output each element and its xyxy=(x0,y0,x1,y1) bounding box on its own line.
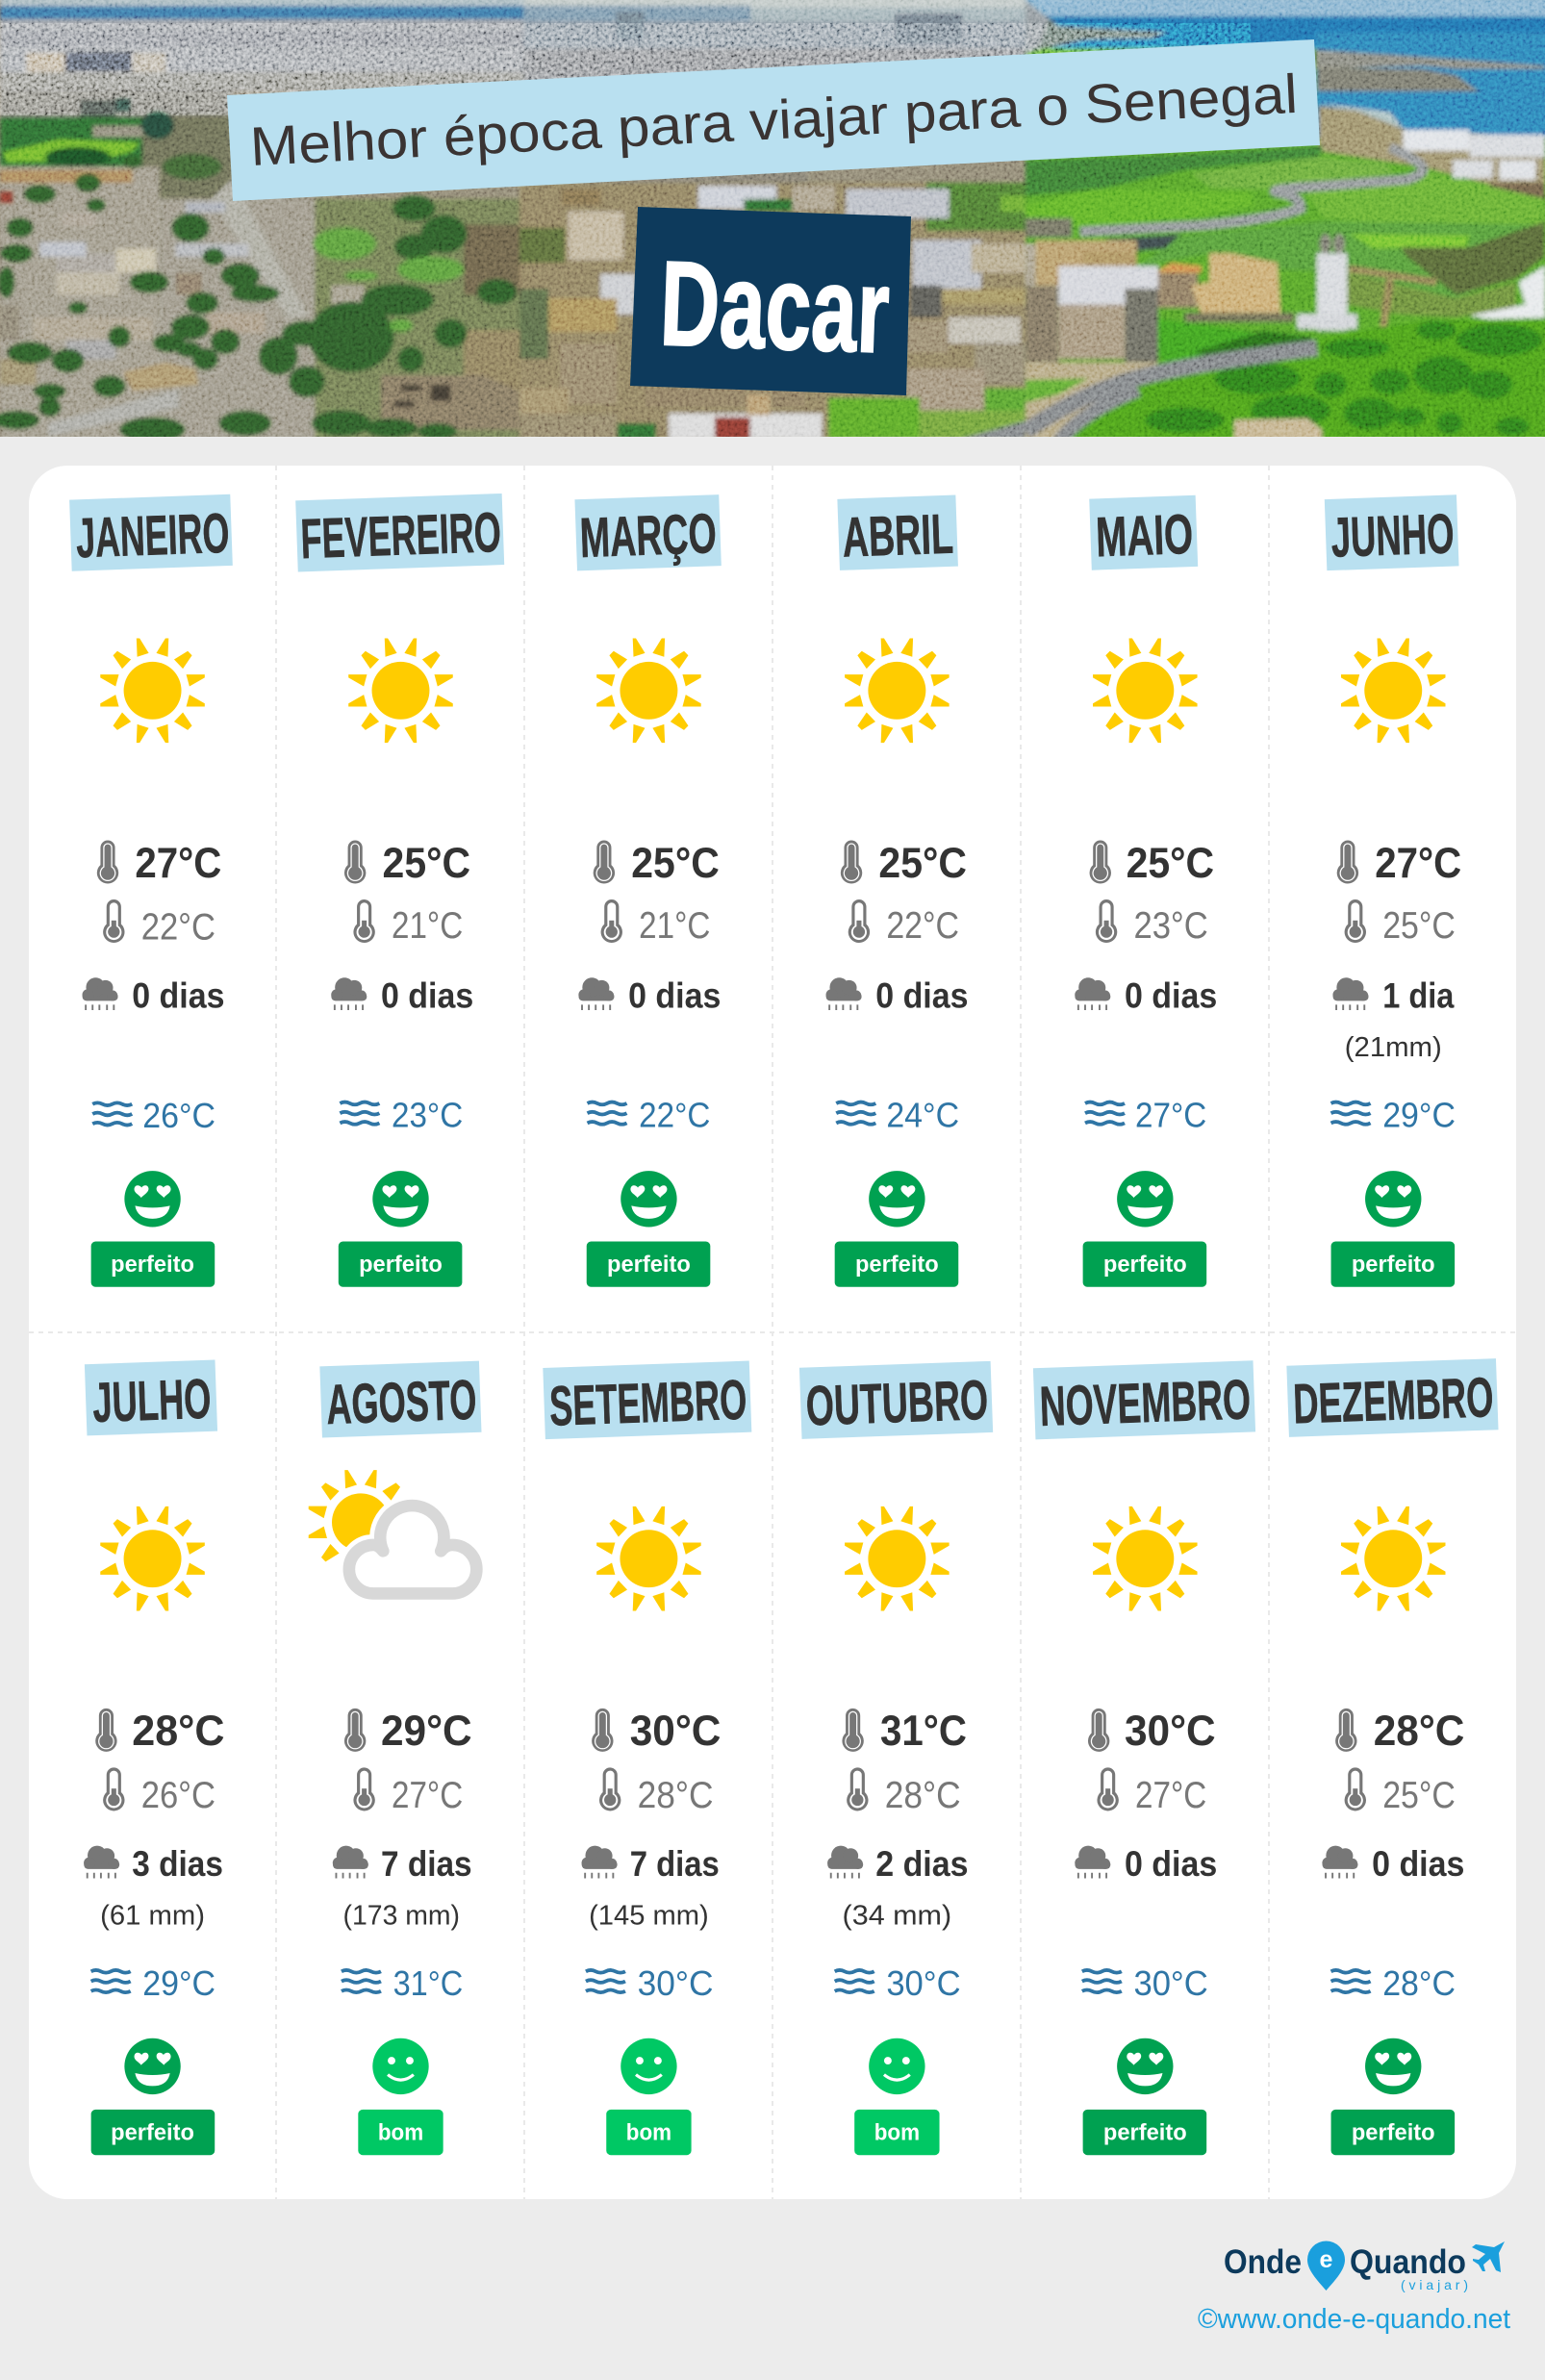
logo: Onde e Quando viajar: (viajar) xyxy=(1401,2277,1468,2292)
rain days xyxy=(826,975,969,1016)
rating face: perfeito xyxy=(372,1171,429,1227)
heading: agosto xyxy=(319,1361,481,1437)
min temperature: 21°C xyxy=(639,905,710,947)
rain days xyxy=(582,1843,720,1884)
max temperature xyxy=(1088,1708,1216,1755)
max temperature xyxy=(841,840,967,887)
city name: Dacar xyxy=(630,207,911,395)
max temperature: 25°C xyxy=(878,840,967,887)
sea temperature: 23°C xyxy=(392,1095,463,1134)
min temperature: 28°C xyxy=(885,1775,961,1816)
max temperature: 25°C xyxy=(1127,840,1214,887)
panel: agosto xyxy=(309,1361,481,2155)
rating face: perfeito xyxy=(1365,1171,1421,1227)
heading: agosto: AGOSTO xyxy=(325,1369,478,1436)
rating badge: bom: bom xyxy=(378,2120,423,2145)
heading: janeiro xyxy=(69,494,233,571)
rating badge: perfeito xyxy=(91,2110,215,2155)
min temperature: 26°C xyxy=(141,1775,215,1816)
sea temperature: 30°C xyxy=(886,1963,961,2003)
panel: fevereiro xyxy=(295,494,504,1287)
rating badge: bom: bom xyxy=(626,2120,671,2145)
rating badge: perfeito: perfeito xyxy=(111,2120,194,2145)
rain days: 0 dias xyxy=(1372,1843,1464,1884)
rating badge: perfeito xyxy=(91,1241,215,1287)
rating face: perfeito xyxy=(869,1171,925,1227)
sea temperature: 26°C xyxy=(142,1096,215,1135)
rating face: perfeito xyxy=(124,1171,181,1227)
panel: monthly climate table xyxy=(29,466,1516,2199)
rating face: perfeito xyxy=(1365,2038,1421,2094)
rain amount: (34 mm) xyxy=(843,1900,951,1931)
rating badge: bom xyxy=(606,2110,692,2155)
max temperature: 25°C xyxy=(383,840,470,887)
min temperature: 21°C xyxy=(392,905,463,947)
sea temperature xyxy=(91,1963,215,2003)
panel: janeiro xyxy=(69,494,233,1287)
rain days xyxy=(827,1843,969,1884)
rating badge: perfeito: perfeito xyxy=(359,1253,443,1278)
rating badge: perfeito xyxy=(1083,1241,1206,1287)
heading: janeiro: JANEIRO xyxy=(75,502,230,570)
heading: maio xyxy=(1089,495,1198,570)
rating badge: bom xyxy=(358,2110,443,2155)
panel: dezembro xyxy=(1286,1358,1499,2155)
heading: outubro: OUTUBRO xyxy=(805,1369,989,1437)
sea temperature: 31°C xyxy=(393,1963,463,2003)
min temperature: 25°C xyxy=(1382,905,1456,947)
max temperature xyxy=(97,840,221,887)
heading: abril xyxy=(837,495,958,570)
rain amount: (145 mm) xyxy=(589,1900,709,1931)
rain days: 0 dias xyxy=(628,975,721,1016)
rain days: 3 dias xyxy=(132,1843,223,1884)
rating face: perfeito xyxy=(1117,1171,1173,1227)
max temperature: 28°C xyxy=(132,1708,224,1755)
min temperature xyxy=(1345,1767,1456,1816)
rain days: 0 dias xyxy=(1125,975,1217,1016)
sea temperature xyxy=(342,1963,463,2003)
min temperature: 25°C xyxy=(1382,1775,1456,1816)
max temperature: 28°C xyxy=(1374,1708,1464,1755)
heading: setembro xyxy=(543,1361,751,1439)
max temperature: 30°C xyxy=(630,1708,721,1755)
icon: sun xyxy=(1093,1506,1198,1610)
rating badge: perfeito: perfeito xyxy=(855,1253,939,1278)
min temperature xyxy=(599,1767,713,1816)
min temperature xyxy=(103,1767,215,1816)
heading: abril: ABRIL xyxy=(842,503,954,570)
rain days xyxy=(578,975,721,1016)
sea temperature xyxy=(1331,1095,1456,1134)
max temperature xyxy=(594,840,720,887)
rain days xyxy=(83,975,224,1016)
website credit: ©www.onde-e-quando.net xyxy=(1198,2304,1510,2335)
rating badge: perfeito xyxy=(1331,1241,1455,1287)
heading: julho: JULHO xyxy=(91,1368,213,1434)
heading: fevereiro xyxy=(295,494,504,572)
title banner: Melhor época para viajar para o Senegal xyxy=(248,63,1299,178)
rain days: 1 dia xyxy=(1382,975,1455,1016)
sea temperature xyxy=(586,1963,713,2003)
heading: novembro xyxy=(1033,1360,1255,1439)
max temperature xyxy=(344,840,470,887)
rain days xyxy=(1075,1843,1217,1884)
icon: sun xyxy=(596,1506,701,1610)
heading: março xyxy=(574,494,722,570)
panel: novembro xyxy=(1033,1360,1255,2155)
heading: julho xyxy=(85,1360,217,1435)
rain days: 0 dias xyxy=(381,975,473,1016)
heading: fevereiro: FEVEREIRO xyxy=(299,501,502,570)
heading: junho: JUNHO xyxy=(1330,502,1456,570)
icon: sun xyxy=(845,1506,950,1610)
heading: novembro: NOVEMBRO xyxy=(1039,1368,1252,1438)
sea temperature xyxy=(340,1095,463,1134)
rating badge: perfeito: perfeito xyxy=(1103,1253,1187,1278)
rain days: 7 dias xyxy=(630,1843,720,1884)
rain days: 7 dias xyxy=(381,1843,472,1884)
icon: location pin xyxy=(1307,2241,1345,2291)
max temperature xyxy=(1335,1708,1464,1755)
heading: setembro: SETEMBRO xyxy=(548,1369,747,1438)
sea temperature: 30°C xyxy=(638,1963,713,2003)
min temperature xyxy=(353,899,463,947)
sea temperature xyxy=(1082,1963,1208,2003)
icon: sun xyxy=(845,639,950,743)
logo: Onde e Quando viajar xyxy=(1224,2241,1505,2292)
rating badge: perfeito xyxy=(835,1241,958,1287)
rain days xyxy=(84,1843,223,1884)
sea temperature xyxy=(92,1096,215,1135)
rating face: bom xyxy=(869,2038,925,2094)
sea temperature: 24°C xyxy=(886,1095,959,1134)
rating badge: bom: bom xyxy=(874,2120,920,2145)
heading: outubro xyxy=(799,1361,993,1439)
sea temperature: 28°C xyxy=(1382,1963,1456,2003)
rating badge: perfeito xyxy=(1331,2110,1455,2155)
logo: Onde e Quando viajar: Onde xyxy=(1224,2243,1302,2281)
rating badge: perfeito: perfeito xyxy=(111,1253,194,1278)
rain days xyxy=(1332,975,1455,1016)
rain days xyxy=(333,1843,472,1884)
max temperature xyxy=(344,1708,472,1755)
max temperature: 25°C xyxy=(631,840,720,887)
max temperature xyxy=(842,1708,967,1755)
rating badge: perfeito xyxy=(587,1241,710,1287)
rating badge: bom xyxy=(854,2110,940,2155)
rain days: 2 dias xyxy=(875,1843,969,1884)
rain amount: (61 mm) xyxy=(100,1900,205,1931)
rain days xyxy=(331,975,473,1016)
min temperature: 22°C xyxy=(141,907,215,949)
rating badge: perfeito xyxy=(339,1241,462,1287)
logo: Onde e Quando viajar: Quando xyxy=(1350,2243,1466,2281)
rain amount: (21mm) xyxy=(1345,1032,1442,1063)
heading: março: MARÇO xyxy=(579,502,718,570)
sea temperature: 29°C xyxy=(1382,1095,1456,1134)
sea temperature xyxy=(588,1095,710,1134)
min temperature xyxy=(601,899,710,947)
min temperature xyxy=(847,1767,961,1816)
rating badge: perfeito: perfeito xyxy=(1352,1253,1435,1278)
sea temperature xyxy=(835,1963,961,2003)
icon: sun xyxy=(348,639,453,743)
icon: sun xyxy=(596,639,701,743)
heading: maio: MAIO xyxy=(1095,503,1194,569)
max temperature: 31°C xyxy=(880,1708,967,1755)
sea temperature: 30°C xyxy=(1133,1963,1208,2003)
rain amount: (173 mm) xyxy=(343,1900,460,1931)
banner photo: aerial view of Dakar xyxy=(0,0,1545,443)
panel: março xyxy=(574,494,722,1287)
rating badge: perfeito xyxy=(1083,2110,1206,2155)
panel: julho xyxy=(84,1360,224,2155)
max temperature: 30°C xyxy=(1125,1708,1216,1755)
icon: sun xyxy=(100,1506,205,1610)
icon: sun xyxy=(100,639,205,743)
max temperature xyxy=(1337,840,1461,887)
rain days xyxy=(1322,1843,1464,1884)
min temperature: 22°C xyxy=(886,905,959,947)
rating badge: perfeito: perfeito xyxy=(1352,2120,1435,2145)
icon: sun xyxy=(1093,639,1198,743)
panel: junho xyxy=(1325,494,1461,1287)
min temperature: 28°C xyxy=(638,1775,713,1816)
rating face: perfeito xyxy=(621,1171,677,1227)
icon: sun xyxy=(1341,639,1446,743)
sea temperature xyxy=(836,1095,959,1134)
max temperature: 27°C xyxy=(135,840,221,887)
rating face: bom xyxy=(372,2038,429,2094)
panel: maio xyxy=(1075,495,1217,1287)
min temperature xyxy=(1096,899,1208,947)
rating badge: perfeito: perfeito xyxy=(607,1253,691,1278)
min temperature xyxy=(103,899,215,949)
min temperature: 27°C xyxy=(392,1775,463,1816)
rating badge: perfeito: perfeito xyxy=(1103,2120,1187,2145)
rain days xyxy=(1075,975,1217,1016)
max temperature xyxy=(592,1708,721,1755)
min temperature xyxy=(353,1767,463,1816)
sea temperature xyxy=(1331,1963,1456,2003)
icon: airplane xyxy=(1472,2241,1505,2272)
rain days: 0 dias xyxy=(1125,1843,1217,1884)
icon: sun xyxy=(1341,1506,1446,1610)
min temperature: 27°C xyxy=(1135,1775,1206,1816)
max temperature: 29°C xyxy=(381,1708,472,1755)
panel: abril xyxy=(826,495,969,1287)
sea temperature xyxy=(1085,1095,1206,1134)
panel: setembro xyxy=(543,1361,751,2155)
icon: location pin: e xyxy=(1320,2246,1333,2273)
sea temperature: 27°C xyxy=(1135,1095,1206,1134)
panel: outubro xyxy=(799,1361,993,2155)
title banner xyxy=(227,39,1320,201)
rating face: perfeito xyxy=(124,2038,181,2094)
heading: junho xyxy=(1325,494,1459,570)
min temperature xyxy=(1097,1767,1206,1816)
min temperature xyxy=(848,899,959,947)
icon: sun behind cloud xyxy=(309,1470,476,1593)
rain days: 0 dias xyxy=(132,975,224,1016)
rain days: 0 dias xyxy=(875,975,969,1016)
min temperature: 23°C xyxy=(1133,905,1208,947)
rating face: perfeito xyxy=(1117,2038,1173,2094)
rating face: bom xyxy=(621,2038,677,2094)
max temperature: 27°C xyxy=(1375,840,1461,887)
sea temperature: 29°C xyxy=(142,1963,215,2003)
min temperature xyxy=(1345,899,1456,947)
city name: Dacar: Dacar xyxy=(658,237,892,378)
sea temperature: 22°C xyxy=(639,1095,710,1134)
max temperature xyxy=(1090,840,1214,887)
